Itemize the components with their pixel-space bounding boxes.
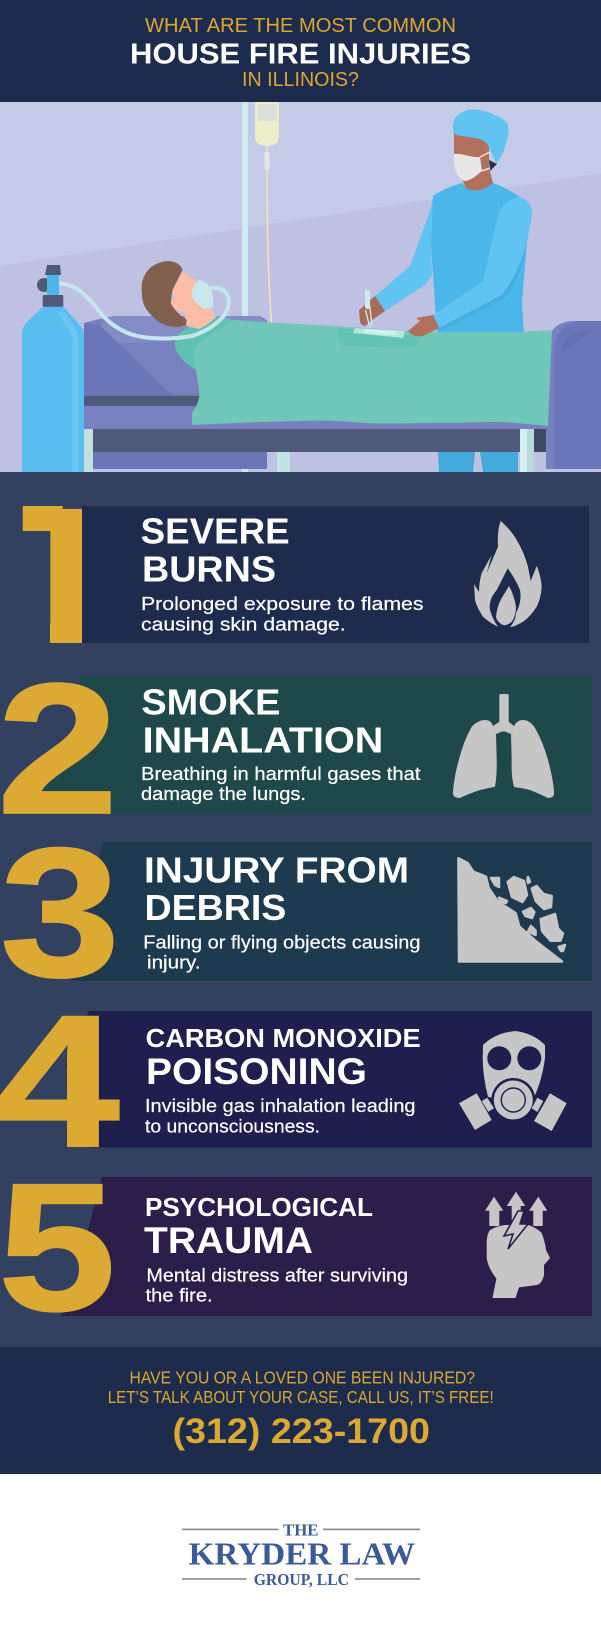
surgeon — [375, 109, 534, 472]
bed head section with pillow — [84, 316, 268, 406]
description: causing skin damage. — [141, 614, 346, 635]
heading: POISONING — [146, 1051, 367, 1092]
heading: DEBRIS — [144, 887, 286, 928]
phone number: (312) 223-1700 — [172, 1412, 430, 1451]
logo: The Kryder Law Group, LLC: KRYDER LAW — [189, 1535, 415, 1571]
patient head with oxygen mask — [142, 261, 234, 370]
description: the fire. — [146, 1285, 213, 1306]
description — [145, 1095, 416, 1136]
header band with title: IN ILLINOIS? — [242, 68, 359, 91]
oxygen tube — [58, 283, 229, 338]
description — [141, 593, 424, 635]
icon: falling rocks — [458, 858, 565, 962]
description: damage the lungs. — [141, 783, 306, 804]
heading: SMOKE — [141, 681, 280, 722]
right bed end — [546, 321, 601, 469]
footer call to action: HAVE YOU OR A LOVED ONE BEEN INJURED? — [130, 1368, 475, 1388]
number 3: 3 — [0, 809, 120, 1015]
header band with title: WHAT ARE THE MOST COMMON — [145, 14, 456, 37]
footer call to action: LET’S TALK ABOUT YOUR CASE, CALL US, IT’S FREE! — [108, 1387, 494, 1407]
number 2: 2 — [0, 645, 118, 852]
icon: oxygen tank — [22, 265, 84, 472]
heading — [144, 1192, 373, 1261]
heading: INJURY FROM — [144, 850, 409, 891]
description — [143, 931, 421, 972]
icon: lungs — [453, 694, 554, 798]
panel: carbon monoxide poisoning — [0, 977, 592, 1187]
footer call to action — [0, 1347, 601, 1474]
description — [146, 1264, 408, 1306]
description: Breathing in harmful gases that — [141, 763, 420, 784]
description: Invisible gas inhalation leading — [145, 1095, 416, 1116]
number 1 — [22, 506, 82, 643]
heading — [141, 681, 383, 761]
header band with title: HOUSE FIRE INJURIES — [130, 38, 471, 70]
logo: The Kryder Law Group, LLC: GROUP, LLC — [254, 1570, 349, 1589]
logo: The Kryder Law Group, LLC — [182, 1521, 420, 1589]
panel: smoke inhalation — [0, 645, 592, 852]
header band with title — [0, 0, 601, 102]
panel: injury from debris — [0, 809, 592, 1015]
heading: TRAUMA — [144, 1220, 313, 1261]
number 5: 5 — [0, 1145, 116, 1349]
heading — [144, 850, 409, 928]
body background — [0, 472, 601, 1347]
heading: BURNS — [142, 548, 276, 589]
icon: IV stand and drip bag — [242, 102, 279, 472]
description: Falling or flying objects causing — [143, 931, 421, 952]
panel: psychological trauma — [0, 1145, 592, 1349]
green blanket — [192, 320, 552, 426]
icon: gas mask — [459, 1031, 567, 1131]
description: to unconsciousness. — [145, 1115, 320, 1136]
heading: PSYCHOLOGICAL — [145, 1192, 373, 1222]
heading: SEVERE — [141, 510, 290, 551]
logo: The Kryder Law Group, LLC: THE — [283, 1521, 318, 1540]
description — [141, 763, 420, 804]
heading — [146, 1023, 421, 1092]
panel: severe burns — [22, 506, 589, 643]
description: Mental distress after surviving — [146, 1264, 408, 1285]
heading: CARBON MONOXIDE — [146, 1023, 421, 1053]
bed frame and legs — [84, 406, 549, 472]
icon: flame — [474, 521, 542, 627]
surgeon hands and instrument — [359, 290, 439, 336]
description: Prolonged exposure to flames — [141, 593, 424, 614]
description: injury. — [147, 951, 200, 972]
illustration: surgeon treating a patient in a hospital bed — [0, 102, 601, 472]
heading — [141, 510, 290, 589]
icon: head with arrows and lightning — [485, 1192, 550, 1298]
heading: INHALATION — [143, 720, 383, 761]
